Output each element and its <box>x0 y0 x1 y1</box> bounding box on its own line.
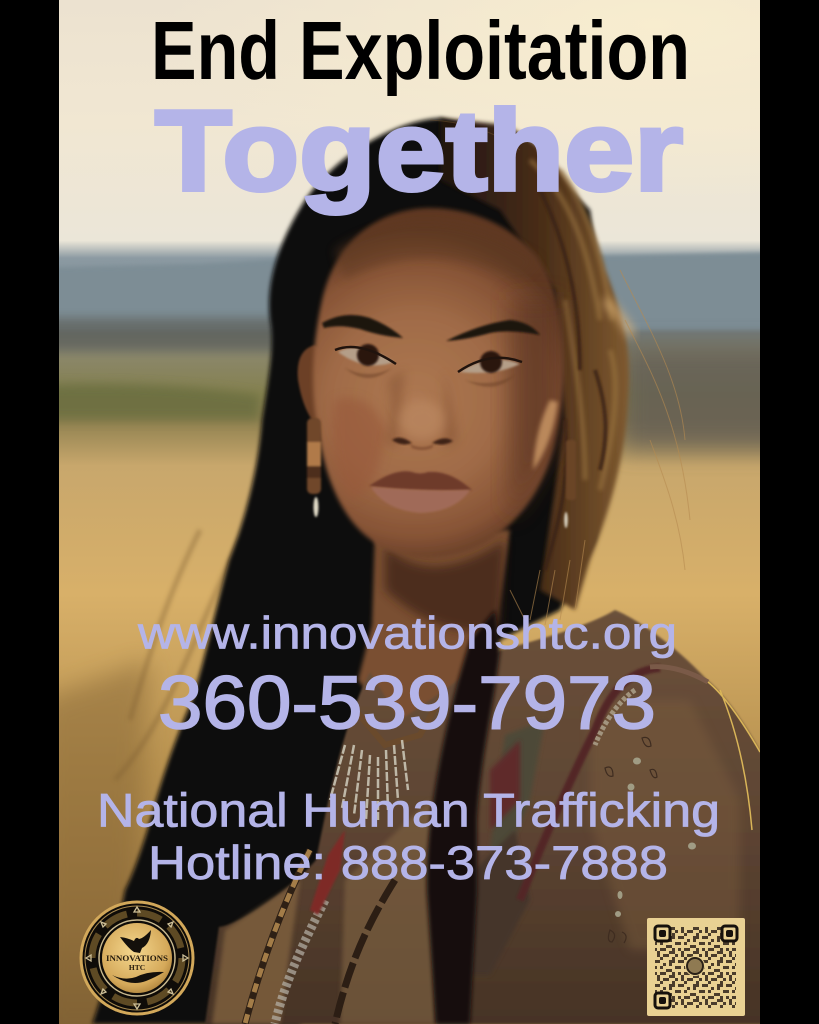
right earring <box>564 440 576 528</box>
ear <box>298 345 322 420</box>
QR code <box>647 918 745 1016</box>
wavy dark fold <box>335 880 395 1024</box>
beaded strand <box>275 900 325 1024</box>
phone number: 360-539-7973 <box>158 660 656 744</box>
left eye <box>335 344 396 378</box>
earring <box>307 418 321 517</box>
logo: Innovations HTC badge: HTC <box>129 963 145 972</box>
logo name: INNOVATIONS <box>106 954 169 963</box>
hotline label: National Human Trafficking <box>97 784 720 836</box>
website: www.innovationshtc.org <box>137 608 677 658</box>
icon: eagle <box>120 930 151 953</box>
nose <box>385 370 458 450</box>
ring triangles <box>86 907 188 1009</box>
robe <box>205 610 770 1024</box>
right eye <box>458 351 522 387</box>
logo: Innovations HTC badge <box>80 900 194 1016</box>
shoulder trim and strap <box>520 668 660 900</box>
patterned panel <box>490 720 545 850</box>
eyebrows <box>322 315 540 341</box>
braided cord <box>245 850 310 1024</box>
dark hair strand over robe <box>427 610 500 1024</box>
hotline number: Hotline: 888-373-7888 <box>148 836 668 889</box>
title: Together: Together <box>155 88 683 215</box>
robe studs <box>615 758 696 917</box>
lips <box>369 471 472 513</box>
face <box>313 208 564 558</box>
finder squares <box>655 926 737 1008</box>
neck <box>356 528 512 719</box>
title: End Exploitation: End Exploitation <box>151 4 690 97</box>
hair silhouette <box>92 118 690 1024</box>
icon: feather <box>112 972 164 983</box>
collar and necklace <box>359 695 439 748</box>
